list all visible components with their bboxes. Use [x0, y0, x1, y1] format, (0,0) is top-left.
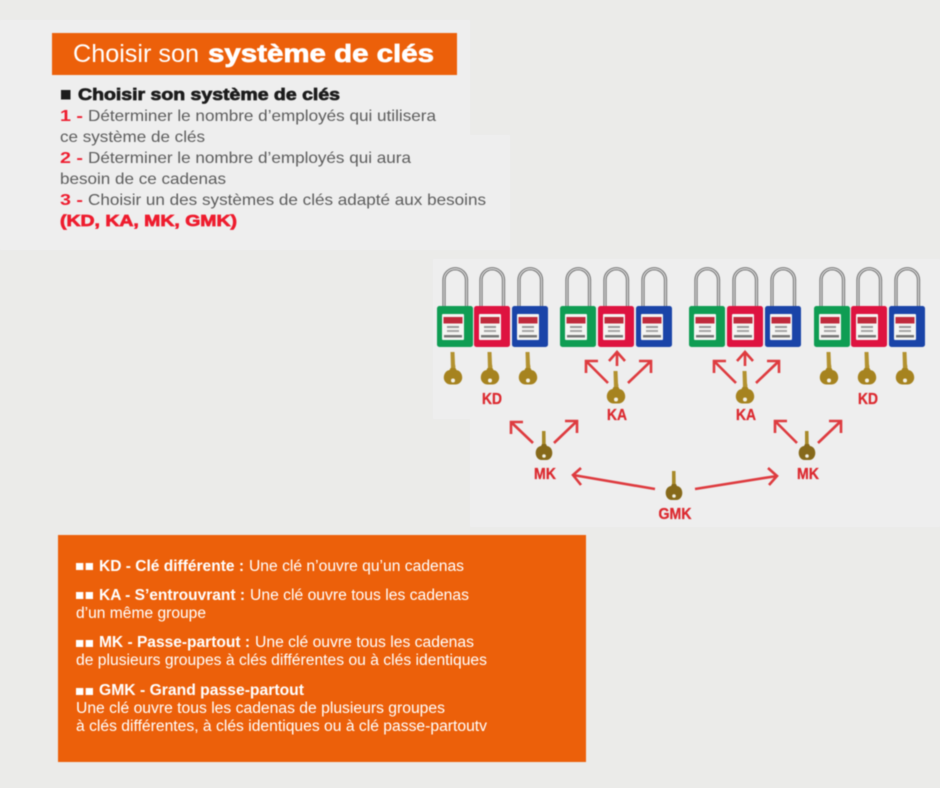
step 3 — [60, 192, 486, 230]
icons: KD keys right — [820, 352, 914, 384]
icon: KA key left — [607, 371, 625, 404]
title banner: Choisir son — [73, 40, 199, 68]
arrow: GMK to MK left — [573, 468, 655, 489]
definition: MK: MK - Passe-partout : — [99, 634, 250, 651]
label: KD left: KD — [482, 391, 502, 408]
padlock group 4: KD — [814, 269, 925, 347]
arrows: MK right — [775, 421, 841, 443]
definition: KA — [76, 587, 469, 622]
heading: steps: Choisir son système de clés — [78, 86, 340, 104]
step 2: besoin de ce cadenas — [60, 171, 226, 188]
step 3: 3 - — [60, 192, 83, 209]
icons: KD keys left — [444, 352, 537, 384]
icon: KA key right — [736, 371, 754, 404]
step 2 — [60, 150, 411, 188]
definition: GMK: à clés différentes, à clés identiques ou à clé passe-partoutv — [76, 718, 487, 735]
definition: KD: KD - Clé différente : — [99, 558, 244, 575]
definition: KA: d’un même groupe — [76, 605, 206, 622]
padlock group 2: KA — [560, 269, 672, 347]
step 2: Déterminer le nombre d’employés qui aura — [88, 150, 411, 167]
panel: introduction — [0, 20, 510, 250]
arrows: MK left — [511, 421, 577, 443]
padlock group 1: KD — [437, 269, 548, 347]
label: MK right: MK — [797, 466, 819, 483]
panel: key system diagram — [433, 259, 940, 527]
definition: MK: Une clé ouvre tous les cadenas — [255, 634, 474, 651]
definition: MK: de plusieurs groupes à clés différentes ou à clés identiques — [76, 652, 487, 669]
label: KD right: KD — [858, 391, 878, 408]
title banner — [52, 33, 457, 75]
definition: KD — [76, 558, 464, 575]
icon: MK key left — [536, 431, 552, 460]
arrows: KA left group — [586, 352, 651, 383]
title banner: système de clés — [208, 40, 434, 68]
icon: GMK key — [666, 471, 682, 500]
definition: GMK: GMK - Grand passe-partout — [99, 682, 304, 699]
arrow: GMK to MK right — [695, 468, 777, 489]
definition: KA: Une clé ouvre tous les cadenas — [250, 587, 469, 604]
label: KA left: KA — [607, 407, 627, 424]
step 1: 1 - — [60, 108, 83, 125]
step 1 — [60, 108, 436, 146]
label: MK left: MK — [534, 466, 556, 483]
definition: KD: Une clé n’ouvre qu’un cadenas — [249, 558, 464, 575]
definition: GMK — [76, 682, 487, 735]
definition: KA: KA - S’entrouvrant : — [99, 587, 245, 604]
step 1: Déterminer le nombre d’employés qui utilisera — [88, 108, 436, 125]
definition: MK — [76, 634, 487, 669]
arrows: KA right group — [714, 352, 779, 383]
definition: GMK: Une clé ouvre tous les cadenas de plusieurs groupes — [76, 700, 445, 717]
step 3: Choisir un des systèmes de clés adapté aux besoins — [88, 192, 486, 209]
step 3: (KD, KA, MK, GMK) — [60, 213, 237, 230]
step 2: 2 - — [60, 150, 83, 167]
icon: MK key right — [799, 431, 815, 460]
panel: definitions — [58, 535, 586, 762]
padlock group 3: KA — [689, 269, 801, 347]
label: GMK: GMK — [658, 506, 692, 523]
step 1: ce système de clés — [60, 129, 205, 146]
label: KA right: KA — [736, 407, 756, 424]
